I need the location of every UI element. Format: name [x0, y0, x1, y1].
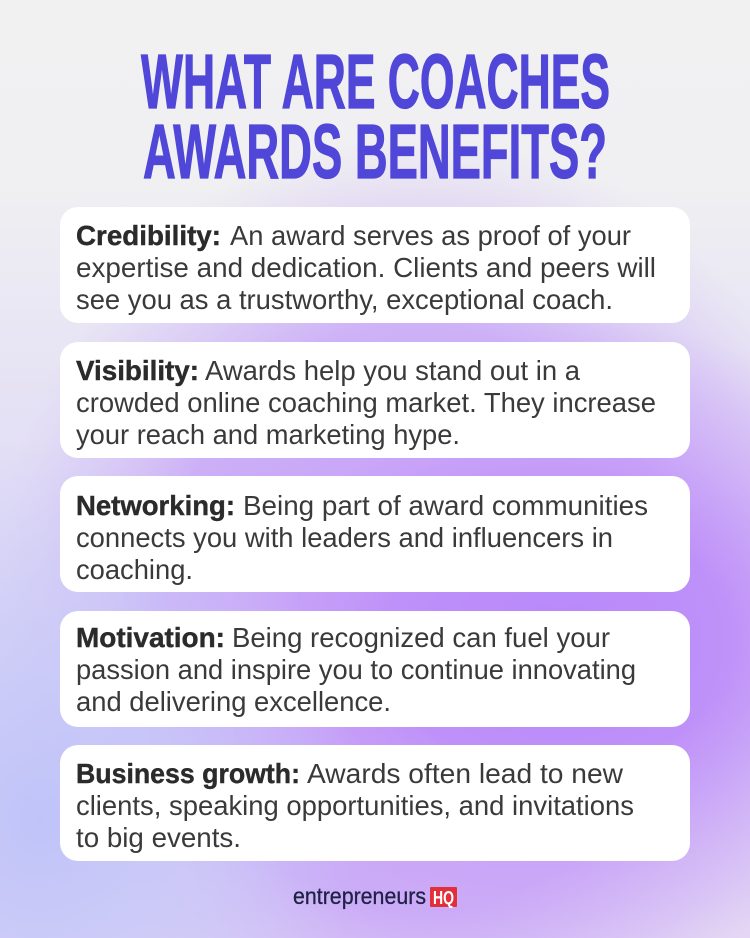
panel: business growth: to big events. [76, 822, 241, 853]
panel: motivation: passion and inspire you to continue innovating [76, 654, 636, 685]
panel: networking: coaching. [76, 554, 193, 585]
panel: credibility: Credibility: [76, 220, 221, 251]
panel: visibility: crowded online coaching market. They increase [76, 387, 656, 418]
panel: business growth: Awards often lead to new [307, 758, 623, 789]
logo: entrepreneursHQ: entrepreneurs [293, 883, 426, 909]
title [141, 39, 610, 195]
panel: business growth: clients, speaking opportunities, and invitations [76, 790, 634, 821]
panel: networking [60, 476, 690, 592]
panel: motivation: Motivation: [76, 622, 225, 653]
panel: credibility: see you as a trustworthy, exceptional coach. [76, 284, 613, 315]
panel: networking: Being part of award communities [243, 490, 648, 521]
panel: motivation [60, 611, 690, 727]
panel: visibility: Visibility: [76, 355, 199, 386]
logo: entrepreneursHQ: HQ [433, 888, 454, 908]
panel: credibility: An award serves as proof of your [230, 220, 631, 251]
panel: networking: Networking: [76, 490, 235, 521]
panel: networking: connects you with leaders and influencers in [76, 522, 613, 553]
panel: credibility [60, 207, 690, 323]
panel: business growth [60, 745, 690, 861]
panel: motivation: Being recognized can fuel your [232, 622, 610, 653]
panel: business growth: Business growth: [76, 758, 300, 789]
panel: visibility [60, 342, 690, 458]
panel: motivation: and delivering excellence. [76, 686, 391, 717]
panel: credibility: expertise and dedication. Clients and peers will [76, 252, 656, 283]
panel: visibility: your reach and marketing hype. [76, 419, 460, 450]
panel: visibility: Awards help you stand out in a [205, 355, 581, 386]
